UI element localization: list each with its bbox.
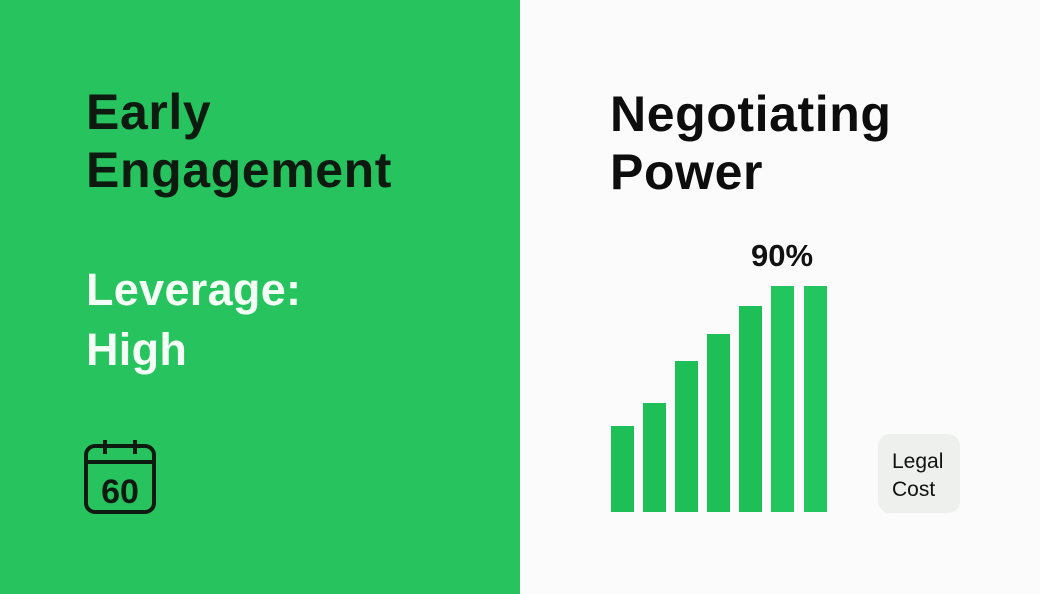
- icon: calendar 60: [84, 440, 156, 514]
- icon: calendar 60: 60: [101, 473, 139, 511]
- callout: legal cost: Legal: [892, 450, 943, 473]
- label: 90%: 90%: [751, 238, 813, 273]
- heading: early engagement: Early: [86, 84, 211, 140]
- text: leverage high: High: [86, 324, 187, 375]
- bar chart: [611, 286, 827, 512]
- heading: early engagement: Engagement: [86, 142, 392, 198]
- text: leverage high: [86, 264, 301, 375]
- text: leverage high: Leverage:: [86, 264, 301, 315]
- heading: negotiating power: [610, 86, 892, 200]
- heading: negotiating power: Negotiating: [610, 86, 892, 142]
- callout: legal cost: Cost: [892, 478, 935, 501]
- panel: early engagement: [0, 0, 520, 594]
- heading: early engagement: [86, 84, 392, 198]
- callout: legal cost: [878, 434, 960, 513]
- heading: negotiating power: Power: [610, 144, 763, 200]
